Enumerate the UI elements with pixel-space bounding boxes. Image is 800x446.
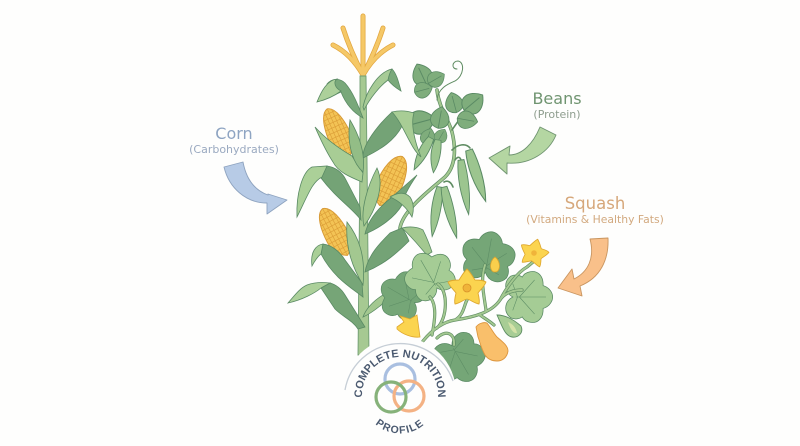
bean pods: [410, 136, 490, 239]
badge: complete nutrition profile: COMPLETE NUTRITION: [354, 349, 446, 397]
leaf: top right: [363, 69, 401, 110]
bean plant: [400, 60, 490, 239]
flower: large: [448, 269, 486, 304]
flower: top right: [517, 236, 551, 268]
badge disc: [344, 337, 456, 446]
vine: [423, 262, 533, 345]
lobed leaf dark bottom: [426, 327, 494, 393]
badge subtitle: [364, 405, 436, 433]
label: Beans: (Protein): [533, 108, 581, 121]
small squash: [497, 315, 522, 337]
butternut squash: [476, 323, 508, 361]
side flower: [397, 315, 420, 337]
infographic canvas: [190, 14, 663, 434]
leaf: bottom right small: [363, 292, 388, 317]
leaf: lower right: [365, 227, 432, 272]
label: Corn: (Carbohydrates): [189, 143, 279, 156]
lobed leaf light left: [396, 242, 462, 306]
squash plant: [371, 227, 553, 393]
badge: complete nutrition profile: PROFILE: [376, 418, 424, 434]
lobed leaf dark left: [371, 264, 432, 326]
vine: [400, 61, 470, 228]
leaf: cob sheath centre: [363, 168, 380, 226]
label: Corn: Corn: [215, 124, 253, 143]
label: Squash: [526, 194, 664, 226]
label: Beans: [532, 89, 582, 121]
label: Squash: Squash: [565, 194, 625, 213]
badge rings: [376, 364, 424, 412]
badge: complete nutrition profile: [344, 341, 454, 434]
leaf: middle right: [363, 111, 421, 158]
label: Beans: Beans: [532, 89, 582, 108]
leaf: middle left: [315, 120, 364, 182]
leaf: lower left: [312, 222, 364, 297]
badge title: [362, 357, 438, 433]
label: Squash: (Vitamins & Healthy Fats): [526, 213, 664, 226]
lobed leaf light right: [506, 272, 553, 322]
arrow: corn: [224, 162, 287, 214]
leaf: top left: [317, 79, 363, 118]
lobed leaf dark top: [458, 227, 518, 284]
label: Corn: [189, 124, 279, 156]
leaves: trios: [405, 60, 489, 147]
arrow: squash: [558, 238, 608, 296]
leaf: bottom left: [288, 282, 365, 329]
arrow: beans: [489, 127, 556, 174]
tassel: [333, 16, 393, 75]
leaf: right lower: [365, 175, 417, 234]
flower bud: [490, 257, 500, 272]
stalk: [358, 76, 369, 355]
badge arc: [345, 344, 453, 390]
corn cobs: [315, 103, 361, 163]
corn plant: [288, 16, 432, 355]
leaf: left large: [297, 166, 361, 220]
